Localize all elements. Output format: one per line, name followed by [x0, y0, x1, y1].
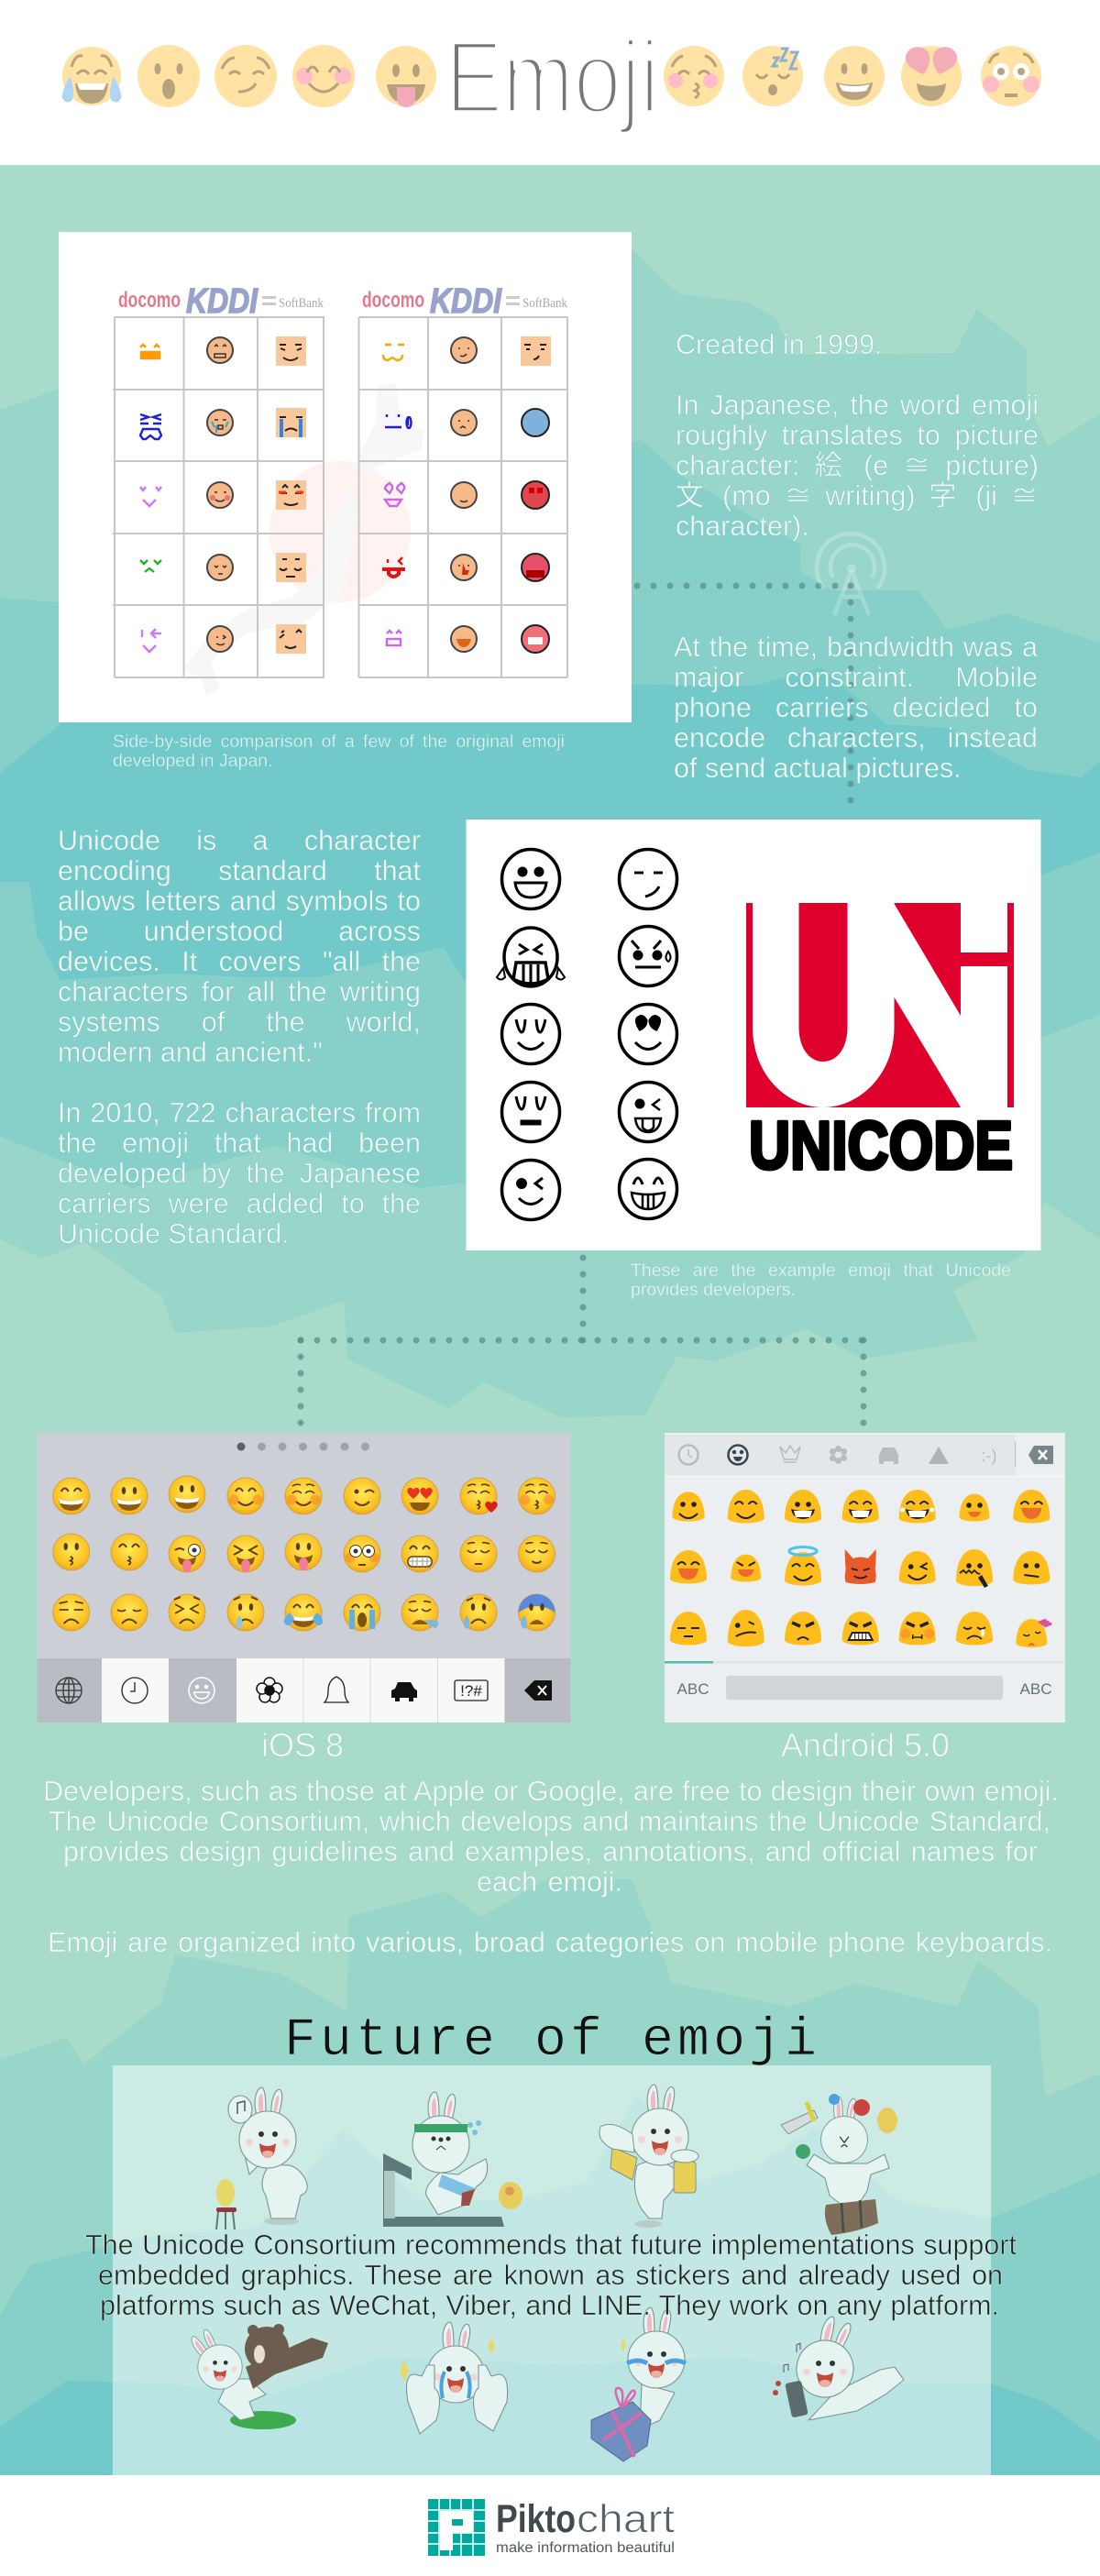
Unicode logo: UNICODE	[749, 1107, 1013, 1183]
icon: globe	[56, 1678, 82, 1703]
text block: bandwidth constraint: encode characters, instead	[674, 722, 1038, 754]
text block: what Unicode is: encoding standard that	[58, 855, 421, 886]
carrier logos	[118, 282, 567, 321]
text block: stickers future: embedded graphics. These are known as stickers and already used on	[98, 2260, 1003, 2291]
icon: backspace	[524, 1680, 552, 1701]
sticker: rabbit juggling on a barrel	[781, 2094, 897, 2235]
Android bottom bar: ABC	[677, 1680, 709, 1698]
Japan map watermark	[183, 383, 424, 697]
text block: created in 1999 and meaning of emoji: In Japanese, the word emoji	[676, 390, 1039, 421]
sticker: rabbit lying with phone	[773, 2311, 904, 2420]
panel: original Japanese emoji comparison	[59, 232, 632, 722]
text block: what Unicode is: the emoji that had been	[58, 1128, 421, 1159]
carrier logos: SoftBank	[279, 296, 324, 311]
caption: comparison image: developed in Japan.	[113, 751, 273, 771]
caption: comparison image: Side-by-side comparison of a few of the original emoji	[113, 732, 565, 752]
text block: developers and categories: provides design guidelines and examples, annotations, and official names for	[63, 1836, 1038, 1867]
text block: bandwidth constraint: phone carriers decided to	[674, 692, 1038, 723]
emoji: KDDI round faces	[207, 337, 477, 652]
icon: car	[391, 1682, 417, 1701]
page dots	[236, 1443, 369, 1450]
text block: stickers future: platforms such as WeChat, Viber, and LINE. They work on any platform.	[100, 2290, 999, 2321]
panel: Unicode example emoji and logo	[466, 820, 1041, 1250]
icon: grinning face	[824, 46, 885, 106]
footer logo: Piktochart: make information beautiful	[496, 2540, 675, 2556]
text block: bandwidth constraint: major constraint. Mobile	[674, 662, 1038, 693]
text block: what Unicode is: systems of the world,	[58, 1007, 421, 1038]
caption: Unicode example emoji	[631, 1260, 1011, 1300]
text block: created in 1999 and meaning of emoji: 文 (mo ≅ writing) 字 (ji ≅	[676, 480, 1039, 512]
text block: what Unicode is: carriers were added to the	[58, 1188, 421, 1219]
header emoji row	[62, 45, 1041, 107]
sticker: rabbit on treadmill	[383, 2092, 522, 2227]
icon: smiling blushing face	[292, 45, 355, 107]
text block: developers and categories: Emoji are organized into various, broad categories on mobile phone keyboards.	[48, 1927, 1052, 1958]
text block: created in 1999 and meaning of emoji: character: 絵 (e ≅ picture)	[676, 450, 1039, 481]
panel: stickers backdrop	[113, 2065, 991, 2475]
carrier logos: docomo	[118, 288, 181, 313]
icon: kissing face	[664, 46, 724, 106]
icon: surprised face	[138, 45, 200, 107]
icon: symbols key: !?#	[460, 1682, 482, 1700]
text block: created in 1999 and meaning of emoji: roughly translates to picture	[676, 420, 1039, 451]
emoji: SoftBank square faces	[276, 336, 551, 654]
sticker: rabbit with beer mugs	[600, 2085, 698, 2228]
icon: bell	[324, 1677, 348, 1702]
Unicode logo	[746, 903, 1014, 1183]
label: Android 5.0: Android 5.0	[781, 1726, 950, 1764]
text block: what Unicode is: be understood across	[58, 916, 421, 947]
Android emoji grid	[670, 1490, 1051, 1647]
sticker: rabbit crying with thumbs up	[400, 2322, 508, 2434]
iOS emoji grid	[53, 1476, 555, 1631]
Android category icons: :-)	[981, 1447, 997, 1465]
panel: Android 5.0 emoji keyboard	[665, 1433, 1065, 1723]
sticker: crying rabbit with gift	[591, 2307, 686, 2461]
carrier logos: SoftBank	[522, 296, 567, 311]
icon: tongue-out face	[376, 46, 436, 107]
Android bottom bar: ABC	[1020, 1680, 1051, 1698]
heading: Future of emoji: Future of emoji	[284, 2011, 820, 2071]
caption: comparison image	[113, 732, 565, 771]
text block: developers and categories: The Unicode Consortium, which develops and maintains the Unicode Standard,	[49, 1806, 1050, 1837]
sticker: rabbit with duck on stool	[216, 2087, 307, 2229]
label: iOS 8: iOS 8	[261, 1726, 344, 1764]
panel: iOS 8 emoji keyboard	[37, 1433, 570, 1723]
icon: laughing with tears	[62, 47, 121, 105]
text block: what Unicode is: allows letters and symbols to	[58, 886, 421, 917]
dotted connector lines	[301, 586, 864, 1426]
text block: developers and categories: Developers, such as those at Apple or Google, are free to design their own emoji.	[43, 1776, 1059, 1807]
footer logo: Piktochart: Pikto	[496, 2497, 576, 2541]
Android bottom bar	[665, 1661, 1065, 1700]
text block: developers and categories	[43, 1776, 1059, 1958]
caption: Unicode example emoji: These are the example emoji that Unicode	[631, 1260, 1011, 1281]
footer logo: Piktochart: chart	[577, 2497, 675, 2541]
text block: bandwidth constraint: of send actual pictures.	[674, 753, 962, 784]
text block: created in 1999 and meaning of emoji	[676, 329, 1039, 542]
text block: what Unicode is: developed by the Japanese	[58, 1158, 421, 1189]
carrier logos: KDDI	[430, 282, 502, 321]
emoji: SoftBank round coloured faces	[522, 409, 549, 653]
icon: heart eyes face	[901, 46, 962, 106]
icon: clock	[122, 1678, 148, 1703]
icon: line-art example emoji	[497, 849, 676, 1219]
text block: what Unicode is: In 2010, 722 characters from	[58, 1097, 421, 1128]
icon: Piktochart tile mark	[428, 2499, 485, 2556]
text block: bandwidth constraint: At the time, bandwidth was a	[674, 632, 1038, 663]
text block: developers and categories: each emoji.	[477, 1866, 622, 1898]
icon: smiley	[189, 1678, 214, 1703]
text block: created in 1999 and meaning of emoji: character).	[676, 511, 809, 542]
stickers: LINE character illustrations	[179, 2085, 904, 2461]
icon: sleeping face with z's	[742, 46, 803, 106]
emoji: first column pixel glyphs	[140, 345, 411, 652]
text block: what Unicode is: devices. It covers "all the	[58, 946, 421, 977]
icon: smirking face	[214, 45, 277, 107]
icon: radio tower	[817, 534, 885, 615]
text block: what Unicode is: Unicode Standard.	[58, 1218, 290, 1249]
text block: what Unicode is: Unicode is a character	[58, 825, 421, 856]
iOS category tab bar	[37, 1658, 570, 1723]
text block: what Unicode is	[58, 825, 421, 1249]
caption: Unicode example emoji: provides developers.	[631, 1280, 796, 1300]
title: Emoji	[446, 20, 659, 135]
text block: bandwidth constraint	[674, 632, 1038, 784]
Android category icons	[678, 1445, 1053, 1465]
icon: symbols key	[455, 1680, 488, 1701]
comparison grids	[113, 317, 567, 677]
text block: what Unicode is: characters for all the writing	[58, 976, 421, 1007]
text block: created in 1999 and meaning of emoji: Created in 1999.	[676, 329, 883, 360]
text block: stickers future: The Unicode Consortium recommends that future implementations support	[85, 2229, 1017, 2261]
icon: flower	[257, 1678, 282, 1702]
footer logo: Piktochart	[0, 2475, 1100, 2576]
carrier logos: docomo	[362, 288, 424, 313]
icon: flushed face	[981, 46, 1041, 106]
text block: what Unicode is: modern and ancient."	[58, 1037, 323, 1068]
sticker: rabbit and bear	[179, 2321, 328, 2429]
text block: stickers future	[85, 2229, 1018, 2321]
carrier logos: KDDI	[186, 282, 258, 321]
